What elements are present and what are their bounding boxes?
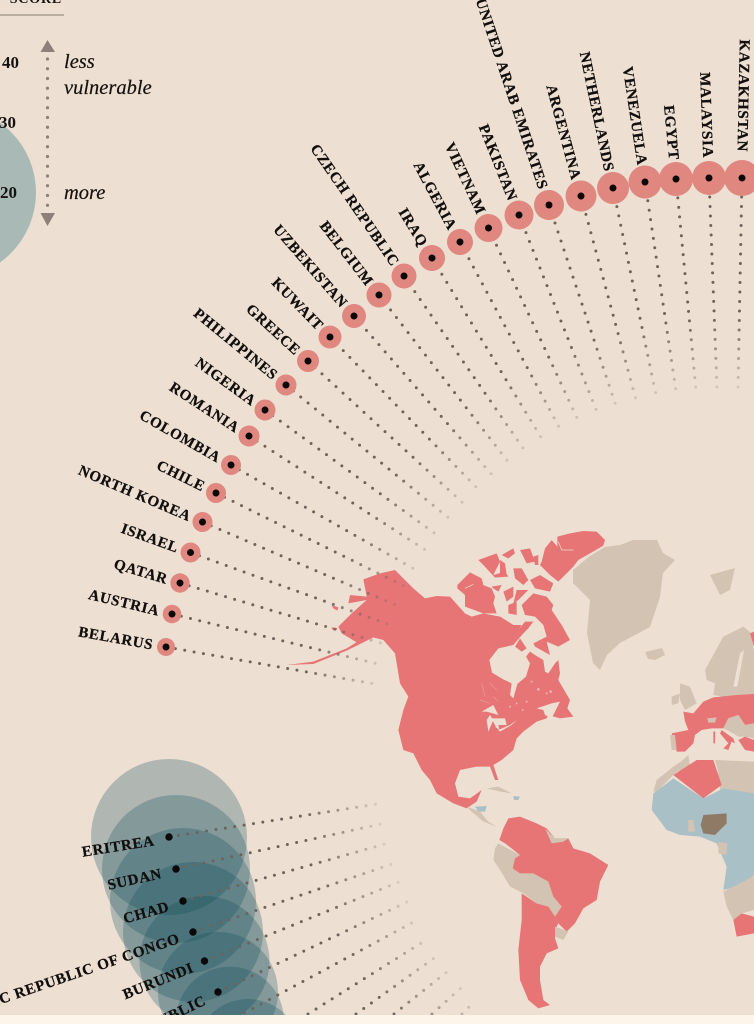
marker: Romania bbox=[165, 377, 264, 451]
marker: Qatar bbox=[112, 554, 192, 595]
marker: Philippines bbox=[189, 303, 301, 400]
marker: Chile bbox=[153, 455, 229, 506]
marker: Austria bbox=[87, 585, 183, 625]
marker: Malaysia: MALAYSIA bbox=[696, 72, 715, 158]
marker: Egypt bbox=[652, 104, 695, 198]
marker: Kazakhstan: KAZAKHSTAN bbox=[734, 39, 752, 152]
marker: Colombia bbox=[136, 405, 245, 479]
marker: Algeria bbox=[406, 157, 478, 260]
marker: Malaysia bbox=[688, 72, 727, 196]
marker: Argentina: ARGENTINA bbox=[542, 83, 583, 182]
legend: score scale bbox=[0, 0, 152, 278]
map: Canadian Arctic islands bbox=[457, 531, 605, 655]
marker: Chad: CHAD bbox=[122, 899, 171, 927]
legend text: less vulnerable: less bbox=[64, 51, 95, 73]
marker: Israel bbox=[118, 518, 203, 565]
dotted radial lines bbox=[166, 178, 742, 1018]
marker: Central African Republic (label cropped by the frame) bbox=[156, 985, 226, 1024]
marker: Venezuela bbox=[611, 64, 664, 201]
legend value 40: 40 bbox=[2, 53, 19, 72]
legend text: more: more bbox=[64, 182, 105, 204]
marker: Pakistan bbox=[470, 120, 538, 234]
marker: Chile: CHILE bbox=[154, 458, 207, 495]
world map bbox=[287, 531, 754, 1008]
map: Greenland and Arctic islands bbox=[573, 540, 735, 670]
marker: Venezuela: VENEZUELA bbox=[619, 66, 649, 167]
marker: Belarus: BELARUS bbox=[77, 624, 154, 654]
marker: Iraq bbox=[391, 203, 450, 276]
marker: Czech Republic bbox=[304, 139, 421, 293]
marker: Kazakhstan bbox=[724, 39, 754, 196]
map: Africa bbox=[652, 760, 754, 937]
bottom page strip bbox=[0, 1015, 754, 1024]
marker: Sudan bbox=[106, 862, 182, 894]
marker: Uzbekistan bbox=[267, 219, 371, 333]
marker: Kuwait bbox=[266, 272, 346, 353]
teal circles: most vulnerable countries bbox=[91, 759, 286, 1015]
marker: Chad bbox=[122, 894, 189, 927]
marker: North Korea bbox=[75, 460, 216, 535]
map: Europe bbox=[657, 627, 754, 790]
marker: Argentina bbox=[536, 81, 600, 215]
marker: Israel: ISRAEL bbox=[119, 521, 181, 557]
marker: Philippines: PHILIPPINES bbox=[190, 306, 280, 384]
marker: Pakistan: PAKISTAN bbox=[475, 122, 520, 203]
marker: Nigeria: NIGERIA bbox=[192, 355, 259, 410]
marker: United Arab Emirates: UNITED ARAB EMIRATES bbox=[472, 0, 550, 192]
marker: Netherlands bbox=[569, 49, 632, 207]
marker: Austria: AUSTRIA bbox=[87, 587, 161, 620]
marker: Romania: ROMANIA bbox=[166, 380, 242, 436]
marker: Belgium: BELGIUM bbox=[316, 218, 376, 289]
marker: Sudan: SUDAN bbox=[106, 866, 163, 894]
map: Great Lakes and speckles bbox=[480, 681, 560, 732]
marker: North Korea: NORTH KOREA bbox=[76, 463, 193, 525]
marker: Belarus bbox=[77, 622, 176, 657]
marker: Vietnam bbox=[436, 137, 507, 247]
marker: Greece: GREECE bbox=[243, 301, 303, 359]
marker: Qatar: QATAR bbox=[112, 557, 170, 588]
marker: Burundi: BURUNDI bbox=[121, 960, 196, 1003]
marker: Belgium bbox=[313, 215, 397, 313]
marker: Kuwait: KUWAIT bbox=[268, 275, 326, 334]
marker: Greece bbox=[241, 298, 324, 377]
marker: Uzbekistan: UZBEKISTAN bbox=[270, 222, 350, 311]
arrow: vulnerability scale bbox=[40, 40, 55, 226]
marker: Nigeria bbox=[191, 352, 280, 425]
marker: Eritrea: ERITREA bbox=[81, 833, 156, 861]
marker: Colombia: COLOMBIA bbox=[136, 408, 223, 466]
marker: Czech Republic: CZECH REPUBLIC bbox=[307, 142, 402, 270]
map: Africa and South America bbox=[467, 760, 754, 1008]
map: North America mainland bbox=[287, 570, 573, 808]
marker: Algeria: ALGERIA bbox=[410, 159, 459, 233]
marker: Vietnam: VIETNAM bbox=[441, 140, 488, 217]
map: South America bbox=[467, 787, 608, 1008]
marker: Egypt: EGYPT bbox=[660, 104, 681, 161]
legend circle bbox=[0, 106, 36, 278]
marker: Netherlands: NETHERLANDS bbox=[576, 51, 616, 173]
legend text: less vulnerable: vulnerable bbox=[64, 77, 152, 99]
marker: Iraq: IRAQ bbox=[395, 206, 430, 250]
legend value 20: 20 bbox=[0, 183, 17, 202]
marker: United Arab Emirates bbox=[466, 0, 568, 224]
